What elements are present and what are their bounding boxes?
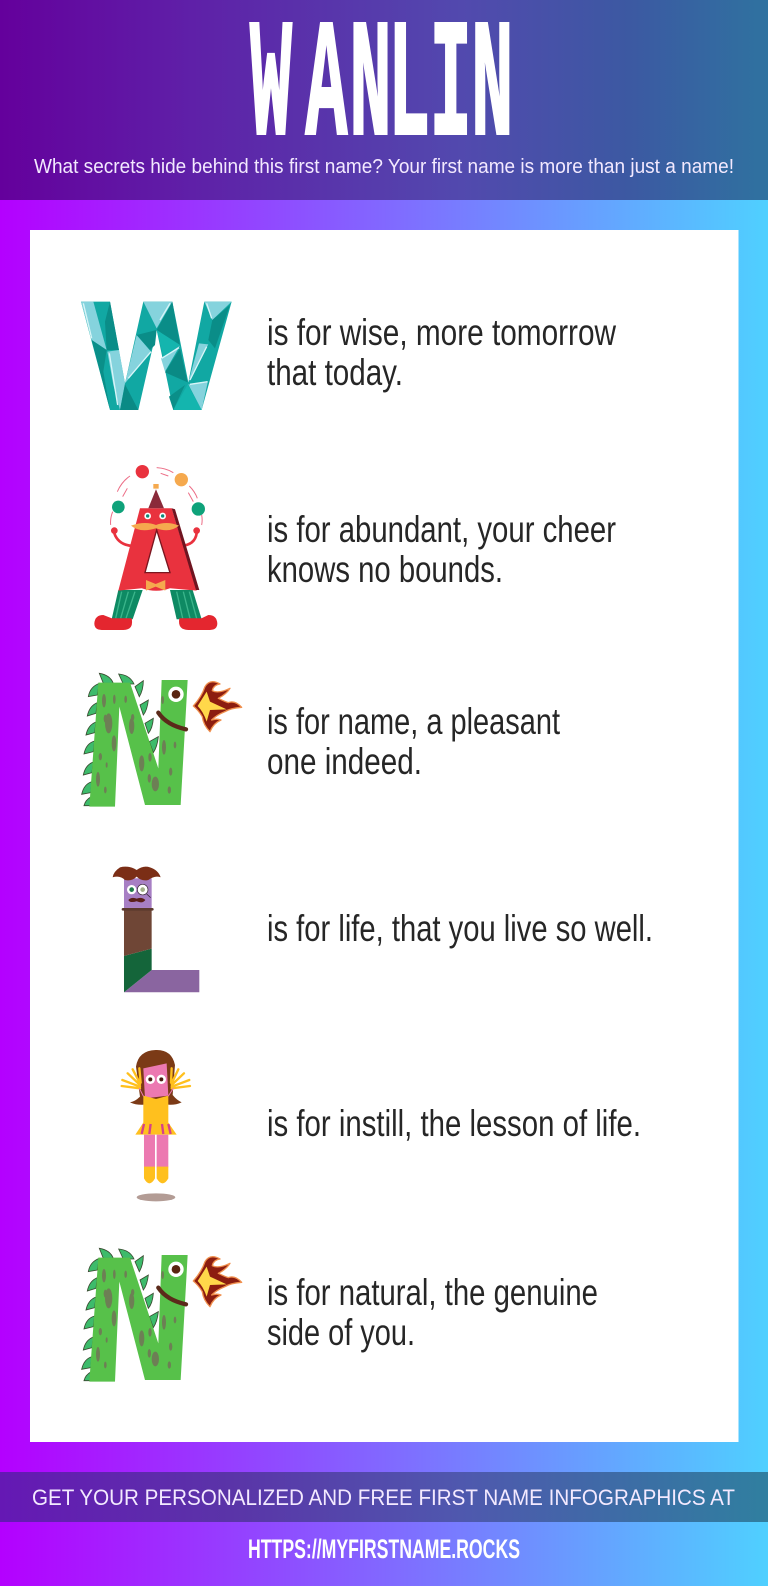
small mustache — [128, 898, 145, 902]
text: W line: is for wise, more tomorrow — [267, 312, 616, 353]
footer url: HTTPS://MYFIRSTNAME.ROCKS — [248, 1534, 520, 1564]
text: A line: knows no bounds. — [267, 549, 503, 590]
skirt — [135, 1123, 177, 1135]
head — [124, 878, 152, 908]
spots — [96, 694, 176, 794]
trousers — [124, 949, 152, 992]
eye — [168, 687, 184, 702]
white content panel — [30, 230, 738, 1442]
dress — [143, 1096, 168, 1123]
flame — [193, 682, 242, 732]
text: I line: is for instill, the lesson of life. — [267, 1103, 641, 1144]
legs — [144, 1135, 155, 1167]
text: N line: is for name, a pleasant — [267, 701, 561, 742]
text: N line — [267, 701, 561, 782]
hair — [130, 1050, 182, 1105]
hair mustache — [113, 867, 161, 880]
footer band — [0, 1472, 768, 1522]
bow tie — [146, 580, 165, 591]
spikes — [82, 673, 158, 806]
text blocks — [267, 312, 653, 1353]
arms — [114, 533, 197, 546]
shadow — [137, 1193, 175, 1201]
juggling balls — [111, 465, 205, 525]
body — [89, 680, 188, 807]
icon: letter W — [81, 302, 232, 410]
text: second N line: side of you. — [267, 1312, 415, 1353]
text: second N line: is for natural, the genuine — [267, 1272, 598, 1313]
text: L line: is for life, that you live so well. — [267, 908, 653, 949]
text: A line: is for abundant, your cheer — [267, 509, 616, 550]
body — [118, 508, 197, 591]
collar — [122, 908, 154, 911]
text: W line — [267, 312, 616, 393]
second letter N dragon — [82, 1248, 242, 1382]
header band — [0, 0, 768, 200]
icon: letter I cheerleader — [122, 1050, 190, 1201]
hat — [148, 489, 164, 508]
legs — [112, 590, 143, 619]
mustache — [131, 523, 179, 530]
head — [143, 1063, 168, 1098]
subtitle: What secrets hide behind this first name? Your first name is more than just a name! — [34, 156, 734, 178]
text: W line: that today. — [267, 352, 403, 393]
coat — [124, 910, 152, 956]
title: WANLIN — [250, 0, 513, 184]
icon: letter A juggling clown — [94, 465, 217, 630]
icon: letter N dragon — [82, 673, 242, 807]
footer call to action: GET YOUR PERSONALIZED AND FREE FIRST NAME INFOGRAPHICS AT — [32, 1485, 735, 1510]
eyes — [146, 1075, 166, 1084]
icon: letter L gentleman — [113, 867, 199, 992]
eyes — [144, 513, 166, 519]
text: N line: one indeed. — [267, 741, 422, 782]
text: A line — [267, 509, 616, 590]
foot — [124, 970, 199, 992]
eyes — [127, 884, 151, 898]
pompoms — [122, 1068, 190, 1096]
text: second N line — [267, 1272, 598, 1353]
shoes — [144, 1167, 155, 1183]
belt — [158, 713, 186, 729]
shoes — [94, 615, 132, 630]
